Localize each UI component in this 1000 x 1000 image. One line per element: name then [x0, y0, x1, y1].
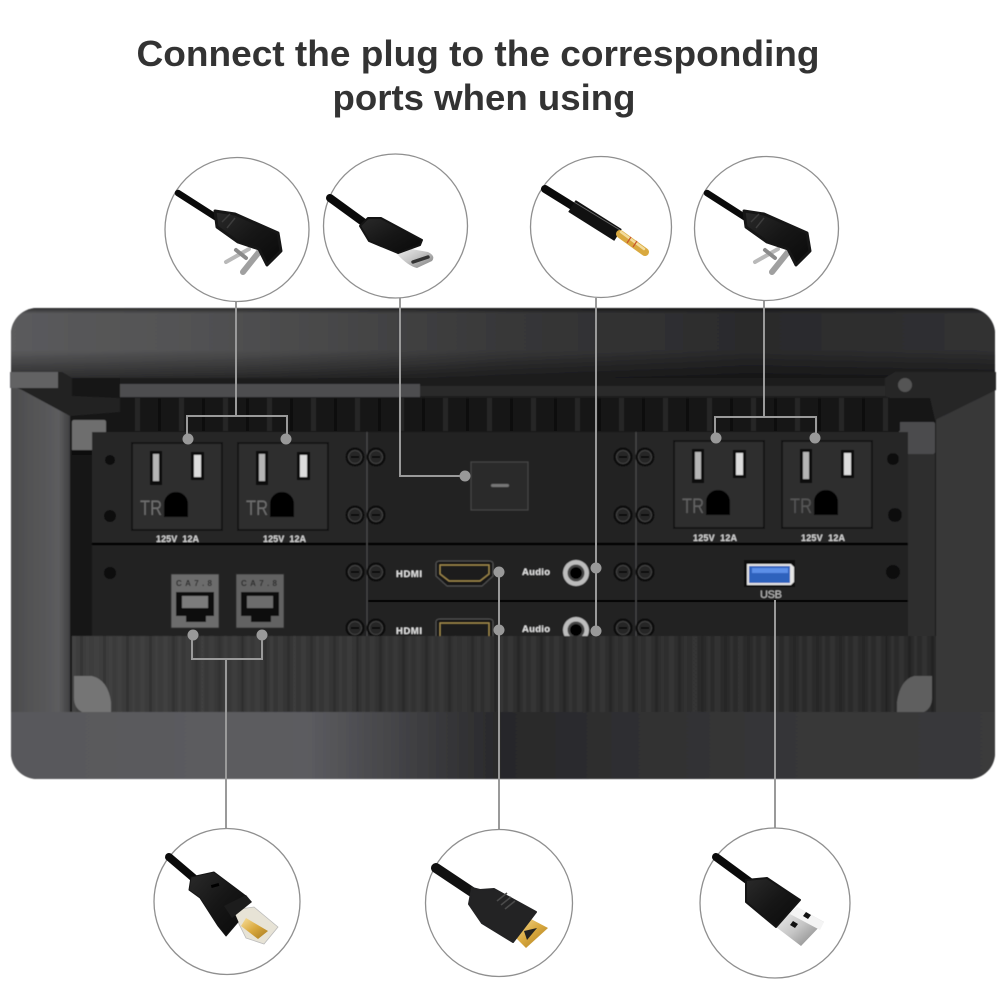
outlet left 2: [238, 443, 328, 530]
HDMI port row 1: HDMI: [396, 569, 422, 580]
left hinge: [10, 372, 120, 416]
ethernet jack 2: CA7.8: [241, 579, 278, 588]
icon: USB-A plug: [700, 828, 850, 978]
cavity: [70, 378, 936, 712]
audio jack row 2: [522, 617, 589, 643]
outlet right 2: [782, 441, 872, 528]
module plate: [92, 432, 908, 637]
outlet ratings: 125V 12A: [693, 533, 738, 543]
outlet ratings: 125V 12A: [156, 534, 200, 544]
cable brush: [72, 636, 936, 712]
screws: [104, 448, 902, 638]
bottom corner pads: [74, 676, 932, 712]
lid hinge bar: [120, 378, 900, 398]
icon: power plug left: [165, 158, 309, 302]
icon: 3.5mm audio plug: [530, 156, 672, 298]
left frame: [11, 378, 71, 718]
outlet left 2: TR: [246, 497, 268, 520]
USB port: [744, 560, 795, 601]
ethernet jack 1: [171, 574, 219, 628]
HDMI port row 1: [396, 561, 493, 586]
HDMI port row 2: HDMI: [396, 626, 422, 637]
USB-C port plate: [471, 462, 528, 510]
right frame: [936, 378, 995, 718]
HDMI port row 2: [396, 619, 493, 637]
outlet ratings: [156, 533, 846, 544]
audio jack row 2: Audio: [522, 624, 550, 635]
audio jack row 1: [522, 560, 589, 586]
icon: USB-C plug: [324, 154, 468, 298]
slats: [120, 398, 900, 431]
outlet right 2: TR: [790, 495, 812, 518]
icon: power plug right: [694, 156, 838, 300]
right hinge: [885, 372, 996, 420]
outlet right 1: TR: [682, 495, 704, 518]
connector lines and dots: [182, 298, 820, 830]
outer frame: [11, 308, 995, 779]
audio jack row 1: Audio: [522, 567, 550, 578]
icon: HDMI plug: [426, 830, 572, 976]
outlet ratings: 125V 12A: [801, 533, 846, 543]
outlet left 1: [132, 443, 222, 530]
ethernet jack 2: [236, 574, 284, 628]
top frame: [11, 308, 995, 378]
panel: floor box hardware: [10, 308, 996, 779]
title: [136, 33, 820, 118]
title: ports when using: [332, 77, 636, 118]
right clip: [899, 422, 935, 454]
bottom frame: [11, 712, 995, 779]
USB port: USB: [760, 589, 782, 601]
outlet left 1: TR: [140, 497, 162, 520]
outlet right 1: [674, 441, 764, 528]
title: Connect the plug to the corresponding: [136, 33, 820, 74]
ethernet jack 1: CA7.8: [176, 579, 213, 588]
left clip: [72, 420, 106, 452]
outlet ratings: 125V 12A: [263, 534, 306, 544]
icon: ethernet plug: [154, 828, 300, 974]
